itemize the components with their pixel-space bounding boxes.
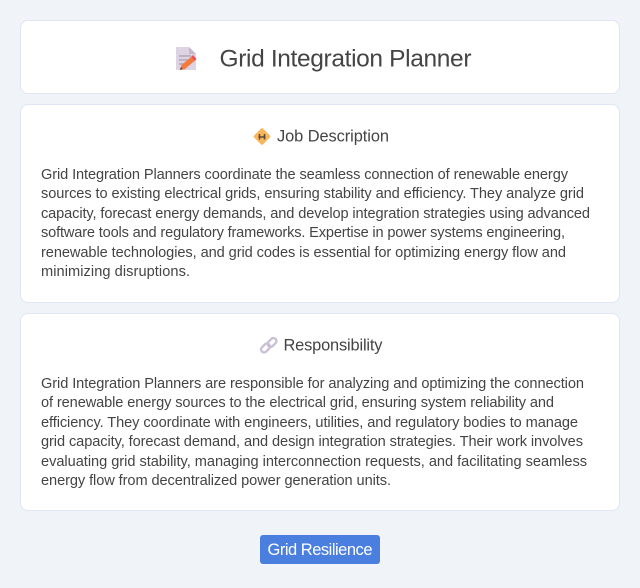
text block: responsibility body: efficiency. They coordinate with engineers, utilities, and regulatory bodies to manage [41, 415, 578, 431]
text block: responsibility body: evaluating grid stability, managing interconnection requests, and facilitating seamless [41, 454, 587, 470]
text block: job description body: software tools and regulatory frameworks. Expertise in power systems engineering, [41, 225, 565, 241]
heading: Job Description: Job Description [277, 128, 389, 146]
panel: responsibility [20, 313, 620, 511]
heading: Responsibility: Responsibility [284, 336, 383, 354]
panel: title [20, 20, 620, 94]
panel: job description [20, 104, 620, 303]
heading: Grid Integration Planner: Grid Integration Planner [220, 46, 472, 72]
text block: job description body: minimizing disruptions. [41, 264, 190, 280]
text block: job description body: Grid Integration Planners coordinate the seamless connection of renewable energy [41, 167, 569, 183]
icon: memo with pencil [176, 47, 196, 70]
text block: job description body: sources to existing electrical grids, ensuring stability and efficiency. They analyze grid [41, 186, 584, 202]
button: Grid Resilience: Grid Resilience [268, 541, 372, 559]
text block: responsibility body: of renewable energy sources to the electrical grid, ensuring system reliability and [41, 395, 554, 411]
button: Grid Resilience [260, 535, 380, 564]
text block: job description body: capacity, forecast energy demands, and develop integration strategies using advanced [41, 206, 590, 222]
text block: responsibility body [41, 376, 587, 489]
text block: job description body: renewable technologies, and grid codes is essential for optimizing energy flow and [41, 245, 566, 261]
icon: link [260, 337, 278, 354]
text block: job description body [41, 167, 590, 280]
text block: responsibility body: grid capacity, forecast demand, and design integration strategies. Their work involves [41, 434, 583, 450]
text block: responsibility body: energy flow from decentralized power generation units. [41, 473, 391, 489]
icon: construction diamond [253, 128, 271, 145]
text block: responsibility body: Grid Integration Planners are responsible for analyzing and optimizing the connection [41, 376, 584, 392]
